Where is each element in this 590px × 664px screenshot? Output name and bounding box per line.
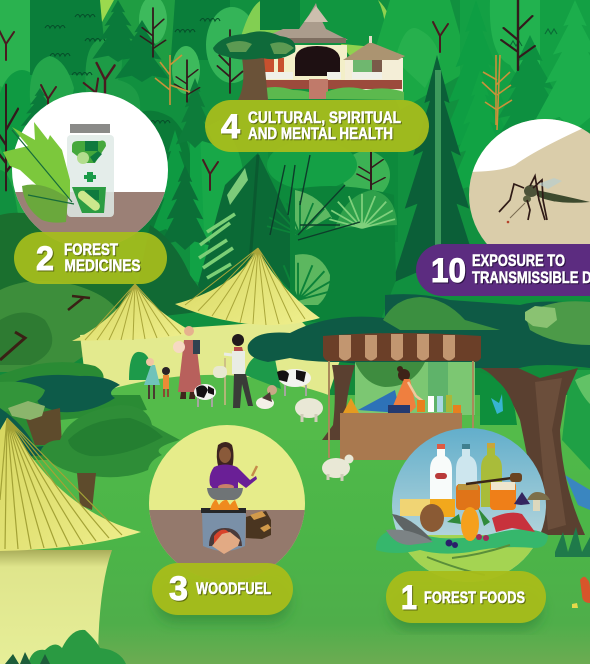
stall awning [323, 333, 481, 362]
butterfly [491, 394, 503, 414]
vendor woman [388, 366, 424, 413]
left low trees [0, 362, 180, 510]
house with tree [213, 3, 405, 100]
cookstove [201, 508, 246, 554]
stall backdrop [355, 362, 475, 415]
main roof [258, 3, 348, 43]
fern undergrowth [262, 155, 397, 322]
sheep lower [322, 454, 354, 481]
stall counter [340, 413, 462, 460]
tree: stall trunk [322, 365, 355, 440]
fish [386, 514, 433, 545]
pine cone [420, 504, 444, 532]
number 1: 1 [401, 579, 417, 617]
hut: right thatched roof [175, 248, 320, 325]
girl [144, 358, 160, 399]
label: exposure: EXPOSURE TO [472, 252, 565, 270]
leaf bed [376, 529, 548, 554]
hut: left thatched roof [72, 284, 195, 341]
badge 10: exposure to transmissible diseases [416, 244, 590, 296]
bare branches [0, 0, 535, 192]
mother with children [173, 326, 202, 399]
panel: woodfuel circle [149, 425, 305, 564]
hut: large foreground [0, 418, 141, 664]
staircase [309, 79, 328, 99]
label: forest foods: FOREST FOODS [424, 589, 525, 607]
cheese [400, 499, 431, 516]
lamb near man [213, 366, 227, 378]
number 3: 3 [169, 570, 188, 608]
soft shadows under badges [156, 580, 542, 630]
bottom left bush [5, 630, 126, 664]
meat [492, 513, 535, 532]
tall central fir [392, 55, 482, 295]
mango [447, 507, 490, 541]
woman cooking [210, 442, 257, 490]
hen [572, 577, 590, 608]
canopy texture [45, 14, 572, 123]
cow left [194, 384, 216, 407]
man with staff [224, 334, 253, 408]
badge 4: cultural, spiritual and mental health [205, 100, 429, 152]
boy [162, 367, 170, 397]
icon: medicine jar [67, 124, 114, 217]
number 4: 4 [221, 108, 240, 146]
house doorway [295, 46, 340, 76]
badge 3: woodfuel [152, 563, 293, 615]
firewood [246, 511, 271, 539]
label: forest medicines: FOREST [64, 241, 118, 259]
fir trees [21, 0, 590, 250]
red windows [262, 58, 284, 72]
badge 2: forest medicines [14, 232, 167, 284]
tree: right trunk [475, 362, 590, 557]
small pavilion [343, 36, 405, 92]
mushroom and berries [514, 492, 550, 511]
panel: forest medicines circle [3, 92, 170, 252]
label: cultural health: CULTURAL, SPIRITUAL [248, 109, 401, 127]
berries [446, 534, 489, 548]
honey jars [456, 473, 522, 510]
badge 1: forest foods [386, 571, 546, 623]
stall products [343, 395, 461, 413]
stall poles [329, 360, 473, 458]
panel: forest foods circle [376, 428, 550, 585]
label: forest medicines: MEDICINES [64, 257, 140, 275]
fern sprigs [427, 545, 510, 575]
label: cultural health: AND MENTAL HEALTH [248, 125, 393, 143]
bottles [430, 443, 502, 507]
fire [210, 499, 239, 510]
family group [144, 326, 253, 408]
panel: exposure to transmissible diseases circle [469, 119, 590, 244]
number 10: 10 [431, 252, 466, 290]
label: woodfuel: WOODFUEL [196, 580, 271, 598]
hedge [257, 87, 404, 100]
icon: medicinal leaf [3, 122, 74, 223]
central dark fir with fronds [198, 153, 312, 305]
dog [256, 385, 277, 409]
sheep upper [295, 398, 323, 422]
number 2: 2 [36, 240, 54, 278]
cow right [277, 369, 311, 396]
dark canopy [248, 294, 590, 368]
orange block [430, 499, 455, 517]
shrine tree [213, 31, 295, 100]
railings [257, 72, 382, 89]
house walls [257, 45, 347, 83]
forest background [0, 0, 590, 350]
market stall [323, 333, 481, 460]
left tree cluster [0, 213, 215, 372]
cooking pot [207, 488, 243, 500]
house base [257, 80, 402, 89]
hut walls and ground [0, 320, 590, 664]
icon: mosquito [499, 176, 590, 223]
